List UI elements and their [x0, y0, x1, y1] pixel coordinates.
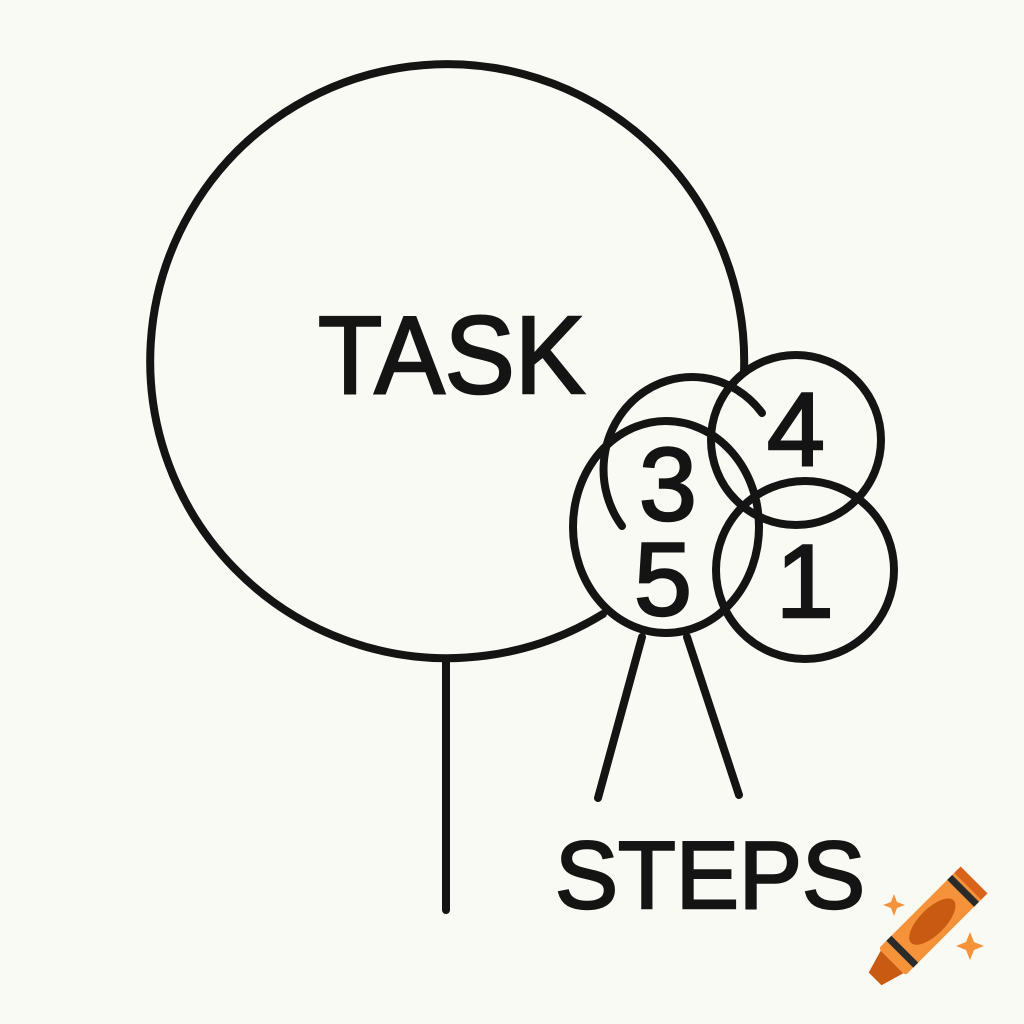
- icon: sparkles: [883, 894, 984, 960]
- stem line: [442, 662, 450, 910]
- legs: [598, 637, 739, 798]
- numbers: [634, 372, 834, 640]
- circle: step 5: [573, 421, 759, 633]
- label: STEPS: STEPS: [555, 822, 865, 929]
- circle: step 1: [716, 481, 894, 659]
- icon: crayon: [862, 866, 988, 992]
- title: TASK: TASK: [318, 294, 585, 417]
- number 4: 4: [767, 372, 825, 488]
- arc: step 3: [604, 377, 762, 526]
- number 5: 5: [634, 522, 692, 638]
- step circles cluster: [573, 355, 894, 659]
- circle: step 4: [711, 355, 881, 525]
- number 3: 3: [639, 427, 697, 543]
- number 1: 1: [776, 524, 834, 640]
- big circle: task: [150, 64, 744, 658]
